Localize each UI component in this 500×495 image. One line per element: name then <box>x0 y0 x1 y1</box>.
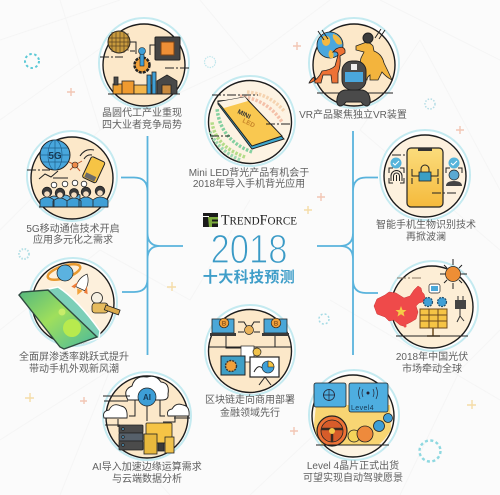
icon: phone with LED label: LED <box>241 118 256 130</box>
icon: central coin node <box>226 322 275 348</box>
icon: Level 4 disc <box>312 375 394 457</box>
icon: chip <box>155 37 180 60</box>
icon: document and coin <box>241 346 261 362</box>
caption: biometric: 再掀波澜 <box>406 230 446 243</box>
icon: face with check <box>446 158 462 186</box>
logo: TrendForce: TRENDFORCE <box>221 212 297 228</box>
decorative sparkles <box>25 42 476 435</box>
icon: rocket <box>69 270 95 299</box>
icon: side clouds <box>104 404 189 418</box>
panel: AI <box>103 372 191 460</box>
icon: lock and circuit <box>412 165 438 184</box>
icon: astronaut <box>92 292 120 315</box>
icon: gear and wrench <box>134 48 150 72</box>
panel: foundry <box>99 18 189 108</box>
icon: robot <box>429 284 440 293</box>
icon: yellow band <box>314 405 391 445</box>
caption: blockchain: 区块链走向商用部署 <box>205 393 295 406</box>
icon: yellow dinosaur <box>356 42 392 80</box>
icon: servers <box>119 425 143 450</box>
caption: full screen: 带动手机外观新风潮 <box>29 362 119 375</box>
panel: biometric <box>380 130 470 220</box>
icon: 5G disc <box>31 137 113 219</box>
icon: curved phone <box>19 287 100 349</box>
icon: devices <box>144 423 174 454</box>
icon: people <box>40 180 108 207</box>
icon: solar disc <box>391 266 473 348</box>
panel: full screen <box>19 258 120 349</box>
icon: blue gears <box>424 298 446 306</box>
icon: left laptop: B <box>222 320 226 328</box>
title: 2018: 2018 <box>210 226 288 272</box>
panel: 5G <box>27 131 117 221</box>
caption: AI: AI导入加速边缘运算需求 <box>92 460 202 473</box>
caption: blockchain: 金融领域先行 <box>220 406 280 419</box>
caption: China solar: 2018年中国光伏 <box>396 350 468 363</box>
caption: Level 4: Level 4晶片正式出货 <box>307 459 399 472</box>
caption: Mini LED: Mini LED背光产品有机会于 <box>189 166 309 179</box>
caption: 5G: 5G移动通信技术开启 <box>26 222 120 235</box>
icon: earth <box>317 32 343 58</box>
connector: right tree <box>317 131 378 355</box>
icon: wafer <box>108 31 130 53</box>
caption: foundry: 四大业者竞争局势 <box>102 118 182 131</box>
caption: biometric: 智能手机生物识别技术 <box>376 218 476 231</box>
icon: Level4 panel: Level4 <box>351 405 374 412</box>
icon: screen disc <box>32 262 114 344</box>
caption: foundry: 晶圆代工产业重现 <box>102 106 182 119</box>
icon: steering wheel <box>317 416 347 446</box>
icon: main cloud <box>126 376 168 400</box>
panel: Mini LED <box>205 76 295 166</box>
connector: left tree <box>121 136 183 355</box>
icon: LED disc <box>208 80 292 164</box>
icon: right laptop: B <box>274 320 278 328</box>
icon: gear monitor <box>221 356 245 375</box>
icon: AI brain: AI <box>143 393 151 402</box>
icon: ball <box>363 33 373 43</box>
icon: solar panel <box>420 309 447 336</box>
icon: biometric disc <box>384 135 466 217</box>
caption: full screen: 全面屏渗透率跳跃式提升 <box>19 350 129 363</box>
title: top ten tech forecast: 十大科技预测 <box>203 268 295 286</box>
panel: Level 4 <box>309 370 399 460</box>
icon: blockchain disc <box>208 310 292 392</box>
caption: China solar: 市场牵动全球 <box>402 362 462 375</box>
panel: China solar <box>374 259 478 351</box>
icon: China map <box>374 286 426 328</box>
caption: 5G: 应用多元化之需求 <box>33 233 113 246</box>
icon: phone <box>82 156 105 183</box>
icon: wifi arcs <box>80 150 94 159</box>
icon: ringed planet <box>46 261 82 283</box>
icon: LED dots <box>210 92 285 160</box>
panel: blockchain <box>205 305 295 395</box>
caption: Level 4: 可望实现自动驾驶愿景 <box>303 471 403 484</box>
icon: globe: 5G <box>48 151 62 162</box>
icon: smartphone <box>407 148 443 207</box>
caption: AI: 与云端数据分析 <box>112 472 182 485</box>
icon: AI disc <box>106 376 188 458</box>
icon: foundry disc <box>103 24 185 106</box>
icon: VR headset <box>342 61 366 90</box>
decorative dotted rings <box>19 54 440 462</box>
icon: chart board <box>250 357 279 385</box>
icon: fingerprint with check <box>389 158 404 183</box>
icon: gamepad <box>337 90 370 106</box>
icon: VR disc <box>313 24 395 106</box>
icon: phone with LED label: MINI <box>236 109 252 121</box>
icon: sun <box>440 259 467 289</box>
icon: plug <box>455 296 466 322</box>
icon: gears <box>348 414 392 442</box>
icon: globe panel <box>314 383 346 407</box>
icon: orange dinosaur <box>309 47 345 83</box>
caption: VR: VR产品聚焦独立VR装置 <box>299 108 407 121</box>
icon: factories <box>113 72 177 94</box>
icon: network node <box>69 161 82 171</box>
panel: VR <box>309 18 399 108</box>
icon: phone with LED label <box>218 97 284 149</box>
caption: Mini LED: 2018年导入手机背光应用 <box>193 177 305 190</box>
